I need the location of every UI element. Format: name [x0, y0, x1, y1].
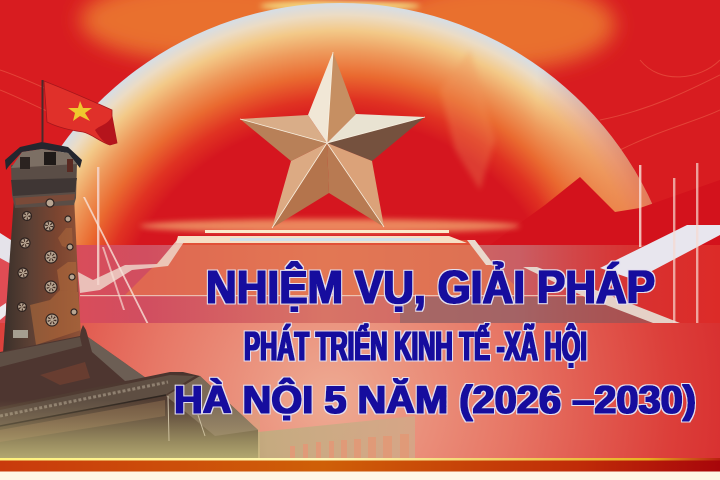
icon: Vietnamese flag: [42, 80, 117, 145]
tower plaster patches: [30, 228, 81, 345]
bottom stripe: [0, 458, 720, 480]
bottom red panel: [0, 323, 720, 459]
citadel walls: [0, 325, 258, 458]
gatehouse wall: [120, 416, 415, 458]
icon: gold five-pointed star: [240, 52, 425, 228]
white ribbons left and right: [0, 225, 720, 323]
monument steps under star: [125, 230, 525, 295]
flag citadel tower: [0, 80, 260, 458]
tower lantern top: [5, 142, 82, 208]
title line 3: HÀ NỘI 5 NĂM (2026 –2030): [174, 377, 696, 422]
light beams: [83, 163, 698, 360]
grey plinth under title: [400, 297, 653, 323]
citadel parapet fade: [0, 400, 260, 458]
tower rosette windows: [13, 199, 77, 338]
tower shaft: [3, 196, 81, 353]
dome: glowing sun arc: [12, 3, 720, 245]
title line 1: NHIỆM VỤ, GIẢI PHÁP: [206, 261, 655, 313]
translucent title band: [0, 245, 720, 323]
title text: [174, 261, 696, 422]
background: red sky: [0, 0, 720, 330]
